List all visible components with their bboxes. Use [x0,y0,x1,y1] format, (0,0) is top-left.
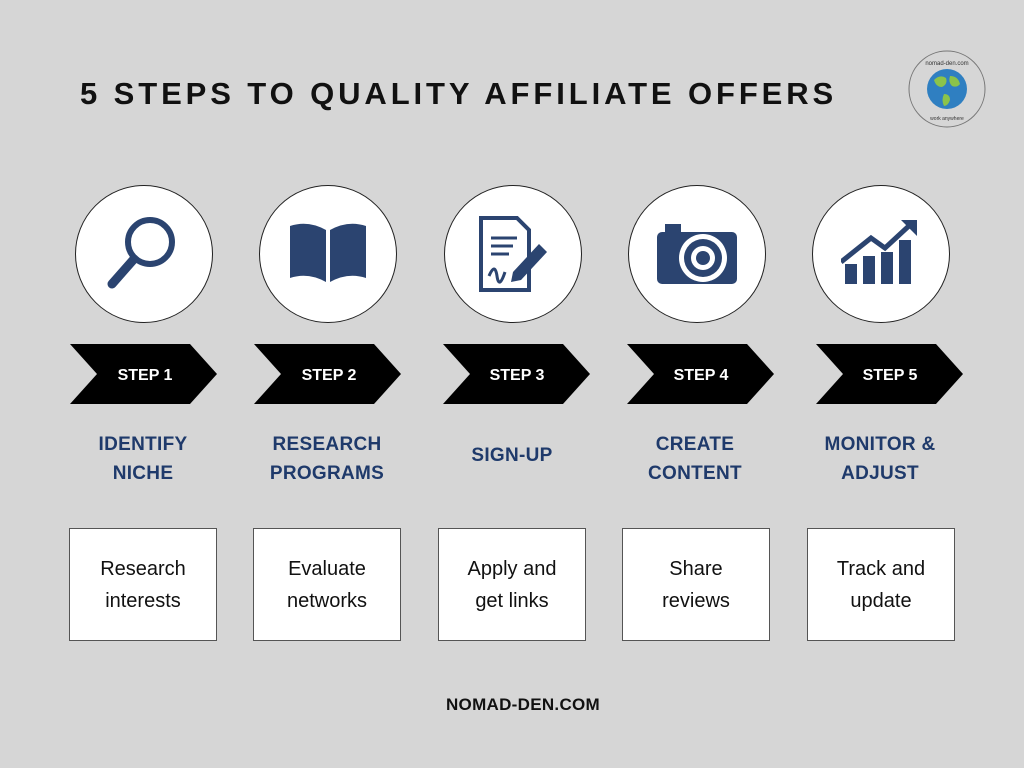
text: get links [475,590,549,612]
icon circle 3: document with pen [444,185,582,323]
icon circle 1: magnifier [75,185,213,323]
footer: NOMAD-DEN.COM [446,695,600,714]
step chevrons: STEP 3 [490,367,545,384]
text: Track and [837,558,925,580]
description boxes: Research [100,558,186,580]
icon circle 5: growth chart [812,185,950,323]
title: 5 STEPS TO QUALITY AFFILIATE OFFERS [80,76,837,111]
text: networks [287,590,367,612]
headings: IDENTIFY [99,434,187,455]
text: RESEARCH [272,434,382,455]
step chevrons: STEP 2 [302,367,357,384]
text: CREATE [656,434,734,455]
headings: NICHE [113,463,173,484]
description boxes [69,528,217,641]
text: update [850,590,912,612]
logo [908,50,986,128]
text: Share [669,558,723,580]
text: MONITOR & [824,434,936,455]
description boxes: interests [105,590,181,612]
text: reviews [662,590,730,612]
step chevrons: STEP 1 [118,367,173,384]
logo: nomad-den.com [925,61,969,67]
text: PROGRAMS [270,463,384,484]
icon circle 4: camera [628,185,766,323]
step chevrons: STEP 5 [863,367,918,384]
headings [99,434,187,484]
text: Apply and [468,558,556,580]
step chevrons: STEP 4 [674,367,729,384]
step chevrons [70,344,963,404]
text: CONTENT [648,463,742,484]
logo: work anywhere [930,116,964,122]
text: ADJUST [841,463,919,484]
text: SIGN-UP [471,445,553,466]
icon circle 2: book [259,185,397,323]
text: Evaluate [288,558,366,580]
